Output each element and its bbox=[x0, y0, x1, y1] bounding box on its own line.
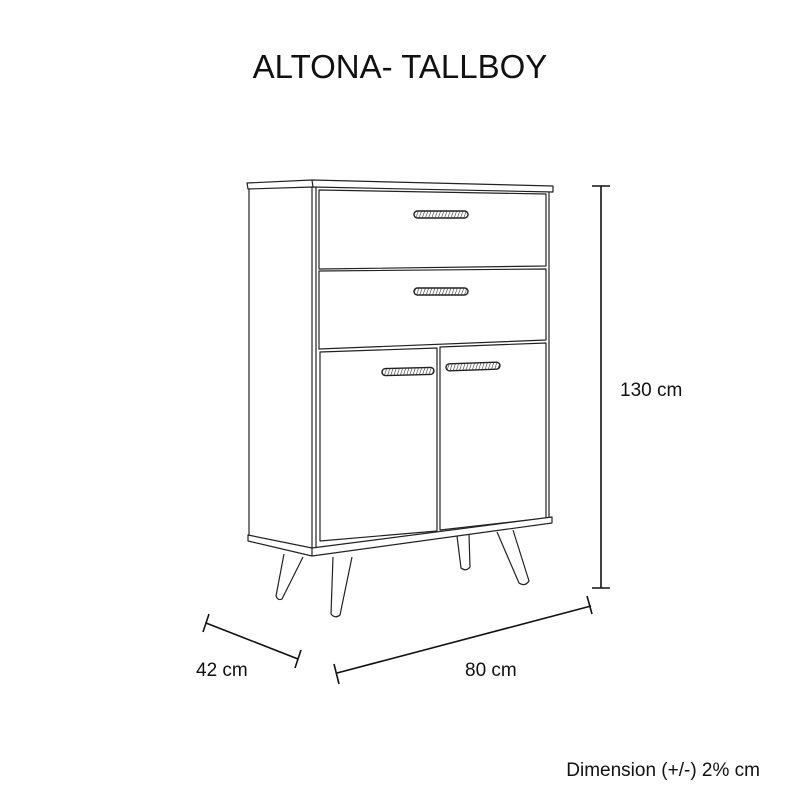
drawer 2 bbox=[319, 269, 546, 349]
left door bbox=[320, 348, 437, 541]
title: ALTONA- TALLBOY bbox=[253, 48, 547, 85]
label: depth: 42 cm bbox=[196, 660, 248, 681]
depth line bbox=[203, 614, 301, 668]
dimension lines bbox=[203, 186, 610, 684]
height line bbox=[592, 186, 610, 588]
drawer 1 bbox=[319, 190, 546, 269]
width line bbox=[334, 596, 592, 684]
label: width: 80 cm bbox=[465, 660, 517, 681]
handles bbox=[382, 211, 500, 376]
right door bbox=[440, 343, 546, 530]
legs bbox=[276, 530, 529, 617]
top slab bbox=[247, 180, 553, 192]
side panel bbox=[249, 187, 549, 548]
label: height: 130 cm bbox=[620, 380, 682, 401]
footnote: Dimension (+/-) 2% cm bbox=[566, 760, 760, 781]
furniture drawing bbox=[247, 180, 553, 617]
bottom slab bbox=[248, 517, 552, 556]
